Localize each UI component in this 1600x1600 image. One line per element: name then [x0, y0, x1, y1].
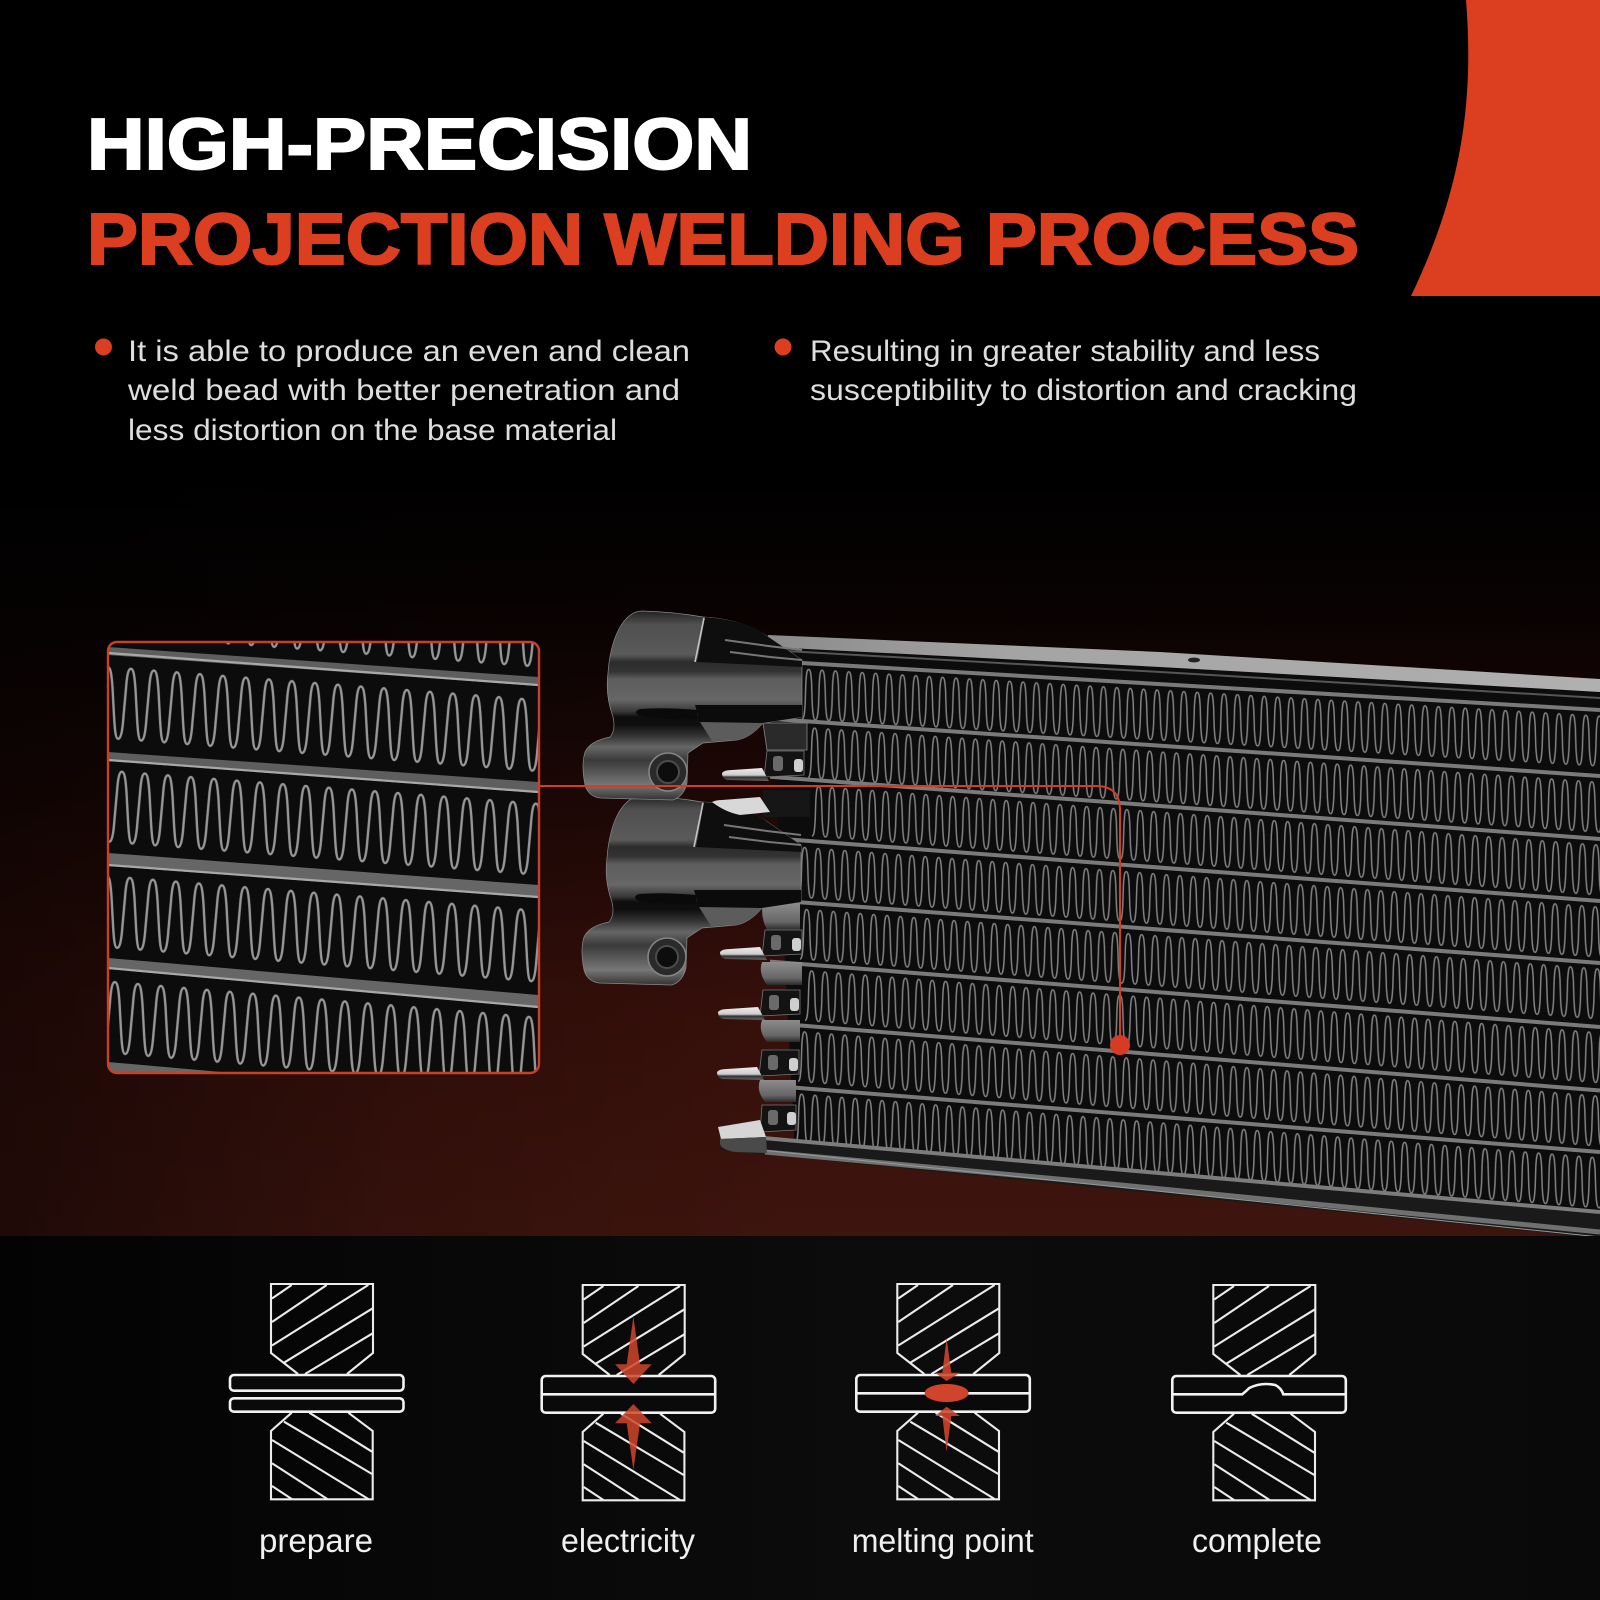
- accent: orange corner shape: [1411, 0, 1600, 296]
- icon: electrodes with melt nugget: [856, 1284, 1030, 1499]
- label: melting point: [852, 1522, 1034, 1559]
- icon: electrodes with separate plates: [230, 1284, 404, 1499]
- bullet text: It is able to produce an even and clean: [128, 335, 690, 368]
- bullet text: susceptibility to distortion and cracking: [810, 374, 1357, 407]
- radiator tubes: [768, 661, 1600, 1152]
- icon: electrodes with current arrows: [542, 1285, 715, 1500]
- header blocks and spikes: [717, 723, 810, 1153]
- label: complete: [1192, 1522, 1322, 1559]
- label: prepare: [259, 1522, 373, 1559]
- inset: zoomed fin detail: [106, 640, 540, 1074]
- background: black to dark red gradient: [0, 0, 1600, 1236]
- mounting bracket: lower: [582, 796, 801, 985]
- bullet list: left column: [95, 335, 690, 447]
- step 4: complete: [1172, 1285, 1346, 1559]
- step 1: prepare: [230, 1284, 404, 1559]
- bottom panel: [0, 1236, 1600, 1600]
- label: electricity: [561, 1522, 695, 1559]
- inset contents: [109, 643, 538, 1072]
- callout line: [540, 786, 1120, 1045]
- inset tubes: [108, 647, 538, 1112]
- title: [87, 105, 1359, 280]
- bullet list: right column: [774, 335, 1357, 407]
- top frame band: [768, 635, 1600, 698]
- radiator fin rows: [795, 663, 1600, 1212]
- callout dot: [1110, 1035, 1130, 1055]
- radiator product illustration: [582, 611, 1600, 1238]
- mounting bracket: upper: [583, 611, 802, 800]
- bullet text: less distortion on the base material: [128, 414, 617, 447]
- bullet dot: [95, 338, 112, 356]
- bullet text: Resulting in greater stability and less: [810, 335, 1320, 368]
- inset border: [108, 642, 539, 1073]
- bullet dot: [774, 338, 792, 356]
- inset fin rows: [109, 643, 538, 1072]
- step 2: electricity: [542, 1285, 715, 1559]
- bottom frame band: [720, 1138, 1600, 1238]
- radiator core: [768, 635, 1600, 1238]
- bullet text: weld bead with better penetration and: [127, 374, 680, 407]
- title line: high-precision: HIGH-PRECISION: [87, 105, 752, 185]
- icon: electrodes with finished weld: [1172, 1285, 1346, 1500]
- title line: projection welding process: PROJECTION WELDING PROCESS: [87, 200, 1359, 280]
- step 3: melting point: [852, 1284, 1034, 1559]
